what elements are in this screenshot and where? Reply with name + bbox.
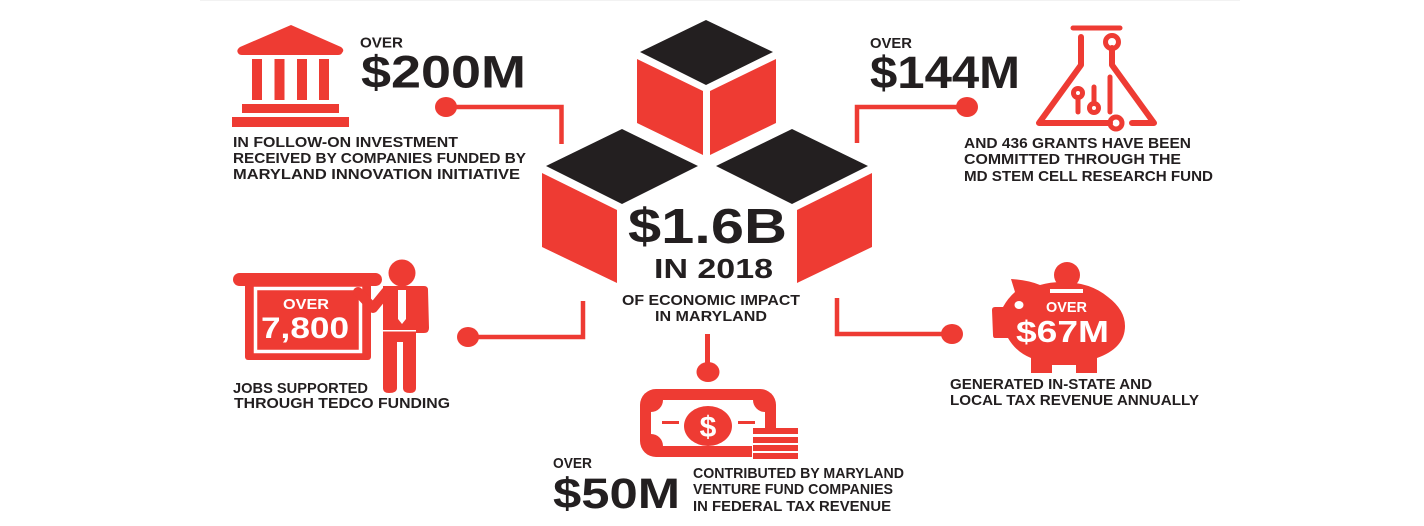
description: THROUGH TEDCO FUNDING — [234, 395, 450, 412]
central headline: IN 2018 — [654, 253, 773, 284]
central headline — [622, 200, 800, 325]
description — [950, 376, 1199, 409]
description: MD STEM CELL RESEARCH FUND — [964, 168, 1213, 185]
connector: top right — [857, 97, 978, 143]
description: AND 436 GRANTS HAVE BEEN — [964, 135, 1191, 152]
value: over $50M: $50M — [553, 470, 680, 518]
connector: bottom right — [837, 298, 963, 344]
connector: bottom — [696, 334, 720, 382]
description: CONTRIBUTED BY MARYLAND — [693, 465, 904, 482]
description: RECEIVED BY COMPANIES FUNDED BY — [233, 150, 526, 167]
icon: presenter — [358, 260, 429, 393]
central headline: OF ECONOMIC IMPACT — [622, 292, 800, 309]
value: over $67M: $67M — [1016, 314, 1109, 349]
icon: bank building — [232, 25, 349, 127]
panel: stem cell grants — [870, 28, 1213, 185]
value: over $200M: OVER — [360, 34, 403, 52]
value: over $67M: OVER — [1046, 299, 1087, 316]
value: over 7,800 — [261, 296, 349, 345]
central cubes — [542, 20, 872, 283]
description: GENERATED IN-STATE AND — [950, 376, 1152, 393]
description — [233, 380, 450, 412]
value: over $200M — [360, 34, 526, 98]
panel: jobs supported — [233, 260, 450, 412]
description: MARYLAND INNOVATION INITIATIVE — [233, 166, 520, 183]
value: over 7,800: OVER — [283, 296, 329, 313]
description — [233, 134, 526, 183]
icon: banknote and coins: $ — [700, 411, 717, 444]
value: over $50M — [553, 455, 680, 518]
central headline: IN MARYLAND — [655, 308, 767, 325]
central headline: $1.6B — [628, 200, 787, 254]
description: COMMITTED THROUGH THE — [964, 151, 1181, 168]
icon: presentation board — [233, 273, 382, 360]
panel: state and local tax revenue — [950, 262, 1199, 409]
value: over $200M: $200M — [361, 46, 526, 98]
value: over $144M: $144M — [870, 47, 1020, 98]
description: IN FOLLOW-ON INVESTMENT — [233, 134, 458, 151]
icon: banknote and coins — [640, 389, 798, 459]
icon: piggy bank — [992, 262, 1125, 373]
connector: top left — [435, 97, 562, 144]
description: LOCAL TAX REVENUE ANNUALLY — [950, 392, 1199, 409]
panel: federal tax revenue — [553, 389, 904, 518]
value: over $50M: OVER — [553, 455, 592, 472]
value: over $67M — [1016, 299, 1109, 349]
description — [964, 135, 1213, 185]
panel: follow-on investment — [232, 25, 526, 183]
value: over 7,800: 7,800 — [261, 312, 349, 345]
value: over $144M: OVER — [870, 35, 912, 52]
description: VENTURE FUND COMPANIES — [693, 481, 893, 498]
icon: flask — [1039, 28, 1154, 129]
description: IN FEDERAL TAX REVENUE — [693, 498, 891, 515]
description: JOBS SUPPORTED — [233, 380, 368, 397]
connector: bottom left — [457, 301, 583, 347]
description — [693, 465, 904, 515]
